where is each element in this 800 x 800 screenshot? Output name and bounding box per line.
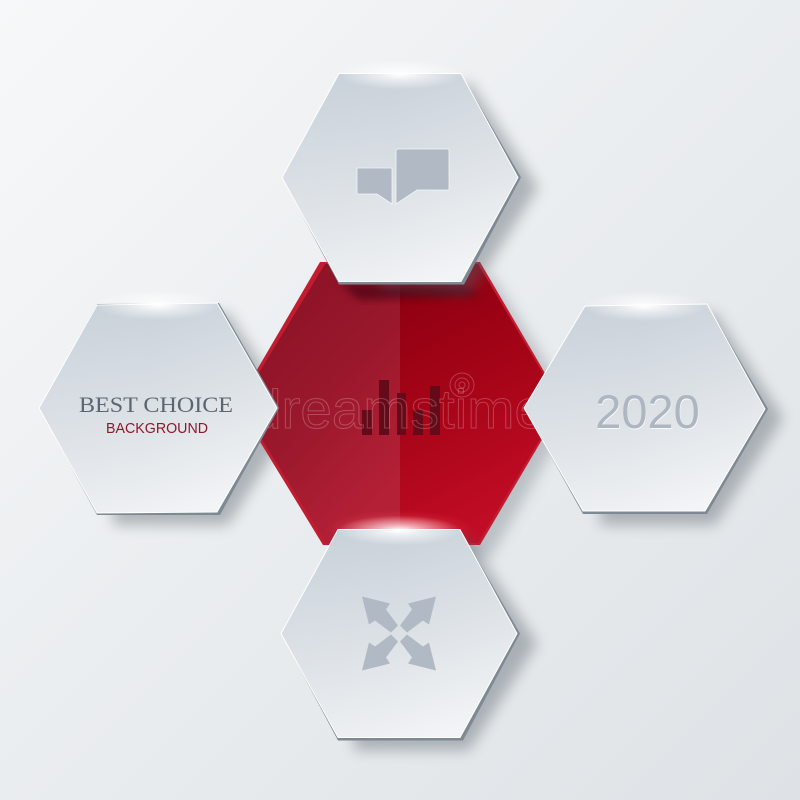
panel: right hexagon (524, 291, 783, 525)
icon: bar chart (362, 380, 440, 435)
icon: four-way arrows (362, 596, 436, 670)
panel: top hexagon (282, 60, 538, 294)
icon: speech bubbles (357, 149, 449, 204)
panel: left hexagon (39, 290, 279, 515)
watermark: dreamstime (250, 378, 546, 440)
shadow: red hexagon (340, 272, 575, 558)
text: background: BACKGROUND (106, 421, 208, 437)
text: 2020: 2020 (596, 386, 700, 439)
shadow: left hexagon (113, 313, 296, 525)
text: 2020: 2020 (595, 385, 700, 438)
panel: bottom hexagon (281, 516, 537, 750)
shadow cast by top hexagon (340, 284, 480, 300)
panel: centre red hexagon (237, 262, 563, 550)
heading: best choice: BEST CHOICE (79, 392, 233, 417)
